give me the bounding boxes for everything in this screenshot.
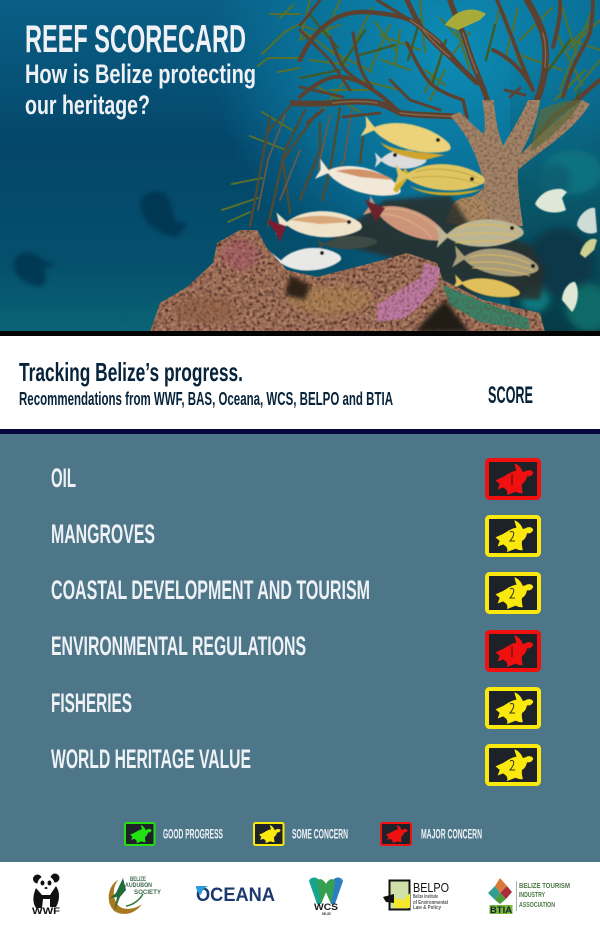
badge: some concern [487,689,539,727]
row: fisheries [51,688,539,727]
title: REEF SCORECARD [25,18,246,61]
legend: some concern [254,823,348,845]
subtitle [25,59,256,120]
row: mangroves [51,517,539,555]
badge: some concern [487,746,539,784]
badge: major concern [487,632,539,670]
logo: Belize Audubon Society [109,876,162,914]
panel: partner logos [0,862,600,927]
subtitle: our heritage? [25,90,150,120]
reef rock [0,230,600,336]
logo: BTIA: INDUSTRY [519,890,545,899]
title [25,18,256,120]
row: coastal development and tourism: COASTAL DEVELOPMENT AND TOURISM [51,575,370,605]
row: mangroves: MANGROVES [51,519,155,549]
logo: BELPO [383,880,449,911]
legend: good progress [125,823,223,845]
logo: WWF panda: WWF [32,906,61,916]
school of grunts [266,113,541,301]
logo: BTIA: ASSOCIATION [519,900,555,909]
legend: GOOD PROGRESS [163,826,223,842]
logo: BTIA: BTIA [490,905,513,915]
row: oil: OIL [51,463,76,493]
badge: major concern [487,460,539,498]
legend: major concern [381,823,482,845]
olive frond strands [222,0,600,226]
badge: some concern [487,574,539,612]
badge: some concern [487,517,539,555]
heading: tracking progress: Tracking Belize’s progress. [19,357,243,387]
row: environmental regulations: ENVIRONMENTAL REGULATIONS [51,631,306,661]
row: world heritage value [51,744,539,784]
subtitle: How is Belize protecting [25,59,256,89]
logo: Belize Audubon Society: SOCIETY [134,889,162,896]
legend: major concern: MAJOR CONCERN [421,826,482,842]
small background fish [445,10,597,312]
dark shadow behind fish school [330,195,545,300]
logo: WCS: BELIZE [322,911,331,916]
logo: BELPO: of Environmental [413,900,449,906]
logo: WCS: WCS [314,902,338,913]
coral tree trunk and branches [293,0,600,228]
legend: some concern: SOME CONCERN [292,826,348,842]
logo: Belize Audubon Society: AUDUBON [125,882,152,889]
logo: Belize Audubon Society: BELIZE [130,876,146,883]
panel: tracking header [0,336,600,434]
logo: BELPO: Law & Policy [413,905,441,911]
logo: BELPO: Belize Institute [413,894,438,900]
logo: BTIA: BELIZE TOURISM [519,881,570,890]
logo: WCS [309,878,343,916]
recommendations source line: Recommendations from WWF, BAS, Oceana, WCS, BELPO and BTIA [19,389,393,409]
logo: WWF panda [32,874,61,916]
row: oil [51,460,539,498]
logo: BELPO: BELPO [413,880,449,895]
logo: Oceana: OCEANA [196,884,275,906]
legend [125,823,482,845]
hero photograph: reef scene [0,0,600,336]
trunk [446,100,590,228]
row: environmental regulations [51,631,539,670]
logo: BTIA [488,878,570,915]
score column heading: SCORE [488,382,533,409]
hanging left strands [250,103,363,226]
row: fisheries: FISHERIES [51,688,132,718]
row: world heritage value: WORLD HERITAGE VALUE [51,744,251,774]
panel: scorecard rows [0,434,600,862]
divers [14,191,187,286]
